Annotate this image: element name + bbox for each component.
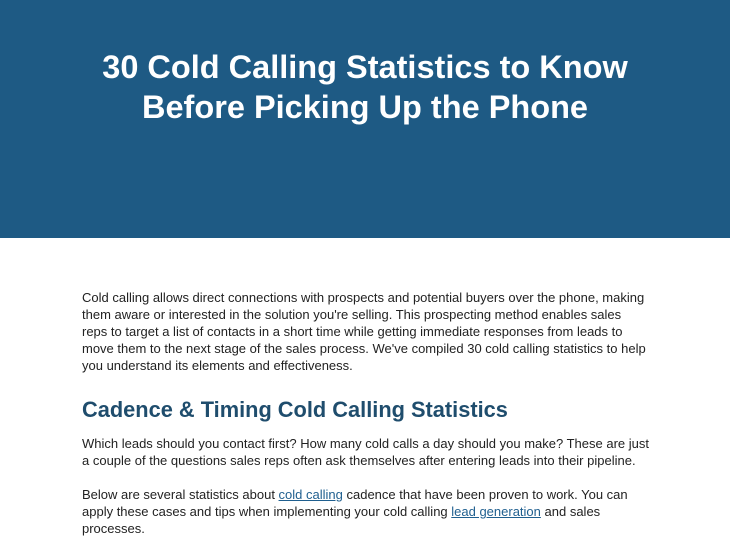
paragraph: questions: a couple of the questions sales reps often ask themselves after entering leads into their pipeline.: [82, 453, 636, 468]
paragraph: cadence: apply these cases and tips when implementing your cold calling lead generation and sales: [82, 504, 600, 519]
title: [102, 49, 628, 125]
intro paragraph: you understand its elements and effectiveness.: [82, 358, 353, 373]
intro paragraph: [82, 290, 646, 373]
intro paragraph: Cold calling allows direct connections with prospects and potential buyers over the phone, making: [82, 290, 644, 305]
paragraph: cadence: Below are several statistics about cold calling cadence that have been proven to work. You can: [82, 487, 628, 502]
section heading: Cadence & Timing Cold Calling Statistics: [82, 397, 508, 422]
paragraph: cadence: processes.: [82, 521, 145, 536]
title: 30 Cold Calling Statistics to Know: [102, 49, 628, 85]
paragraph: cadence: [82, 487, 628, 536]
paragraph: questions: Which leads should you contact first? How many cold calls a day should you make? These are just: [82, 436, 649, 451]
paragraph: questions: [82, 436, 649, 468]
header banner: [0, 0, 730, 238]
intro paragraph: reps to target a list of contacts in a short time while getting immediate responses from leads to: [82, 324, 622, 339]
title: Before Picking Up the Phone: [142, 89, 588, 125]
intro paragraph: them aware or interested in the solution you're selling. This prospecting method enables sales: [82, 307, 621, 322]
intro paragraph: move them to the next stage of the sales process. We've compiled 30 cold calling statistics to help: [82, 341, 646, 356]
